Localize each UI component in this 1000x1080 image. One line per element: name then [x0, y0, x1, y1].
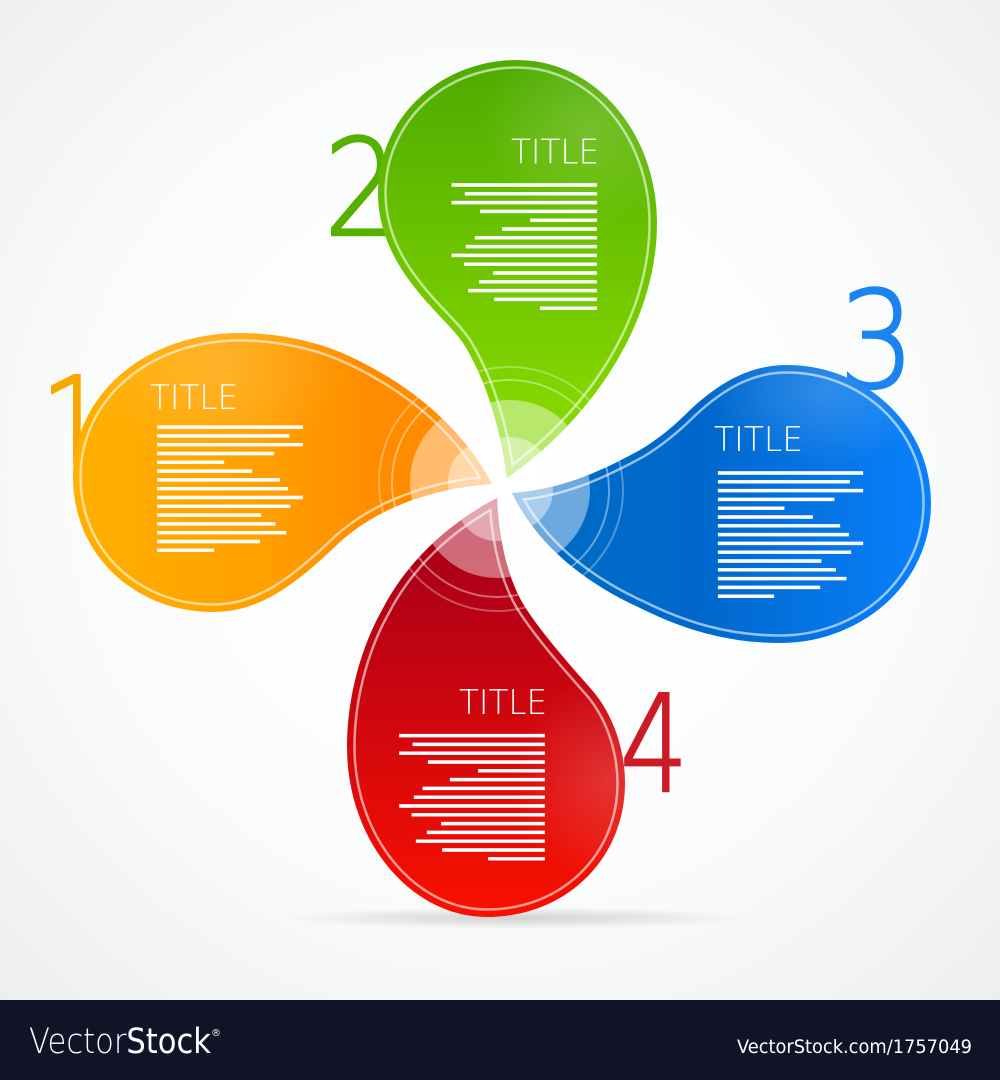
ground shadow [285, 907, 745, 929]
panel: blue drop 3 [512, 365, 931, 643]
footer registered mark: ® [211, 1028, 221, 1039]
footer url: VectorStock.com/1757049 [737, 1036, 972, 1058]
footer bar [0, 1000, 1000, 1080]
number 4: 4 [620, 666, 688, 823]
panel: orange drop 1 [73, 333, 492, 612]
footer logo: VectorStock [29, 1022, 212, 1062]
text lines 1 [157, 426, 303, 552]
number 3: 3 [839, 262, 915, 419]
number 1: 1 [40, 349, 110, 509]
text lines 4 [399, 734, 545, 860]
title 2: TITLE [511, 132, 599, 172]
title 1: TITLE [150, 378, 238, 418]
panel: red drop 4 [347, 498, 625, 917]
title 3: TITLE [714, 420, 803, 460]
number 2: 2 [324, 111, 399, 267]
title 4: TITLE [459, 683, 547, 723]
panel: green drop 2 [378, 60, 657, 478]
text lines 3 [718, 471, 863, 598]
text lines 2 [452, 183, 597, 310]
